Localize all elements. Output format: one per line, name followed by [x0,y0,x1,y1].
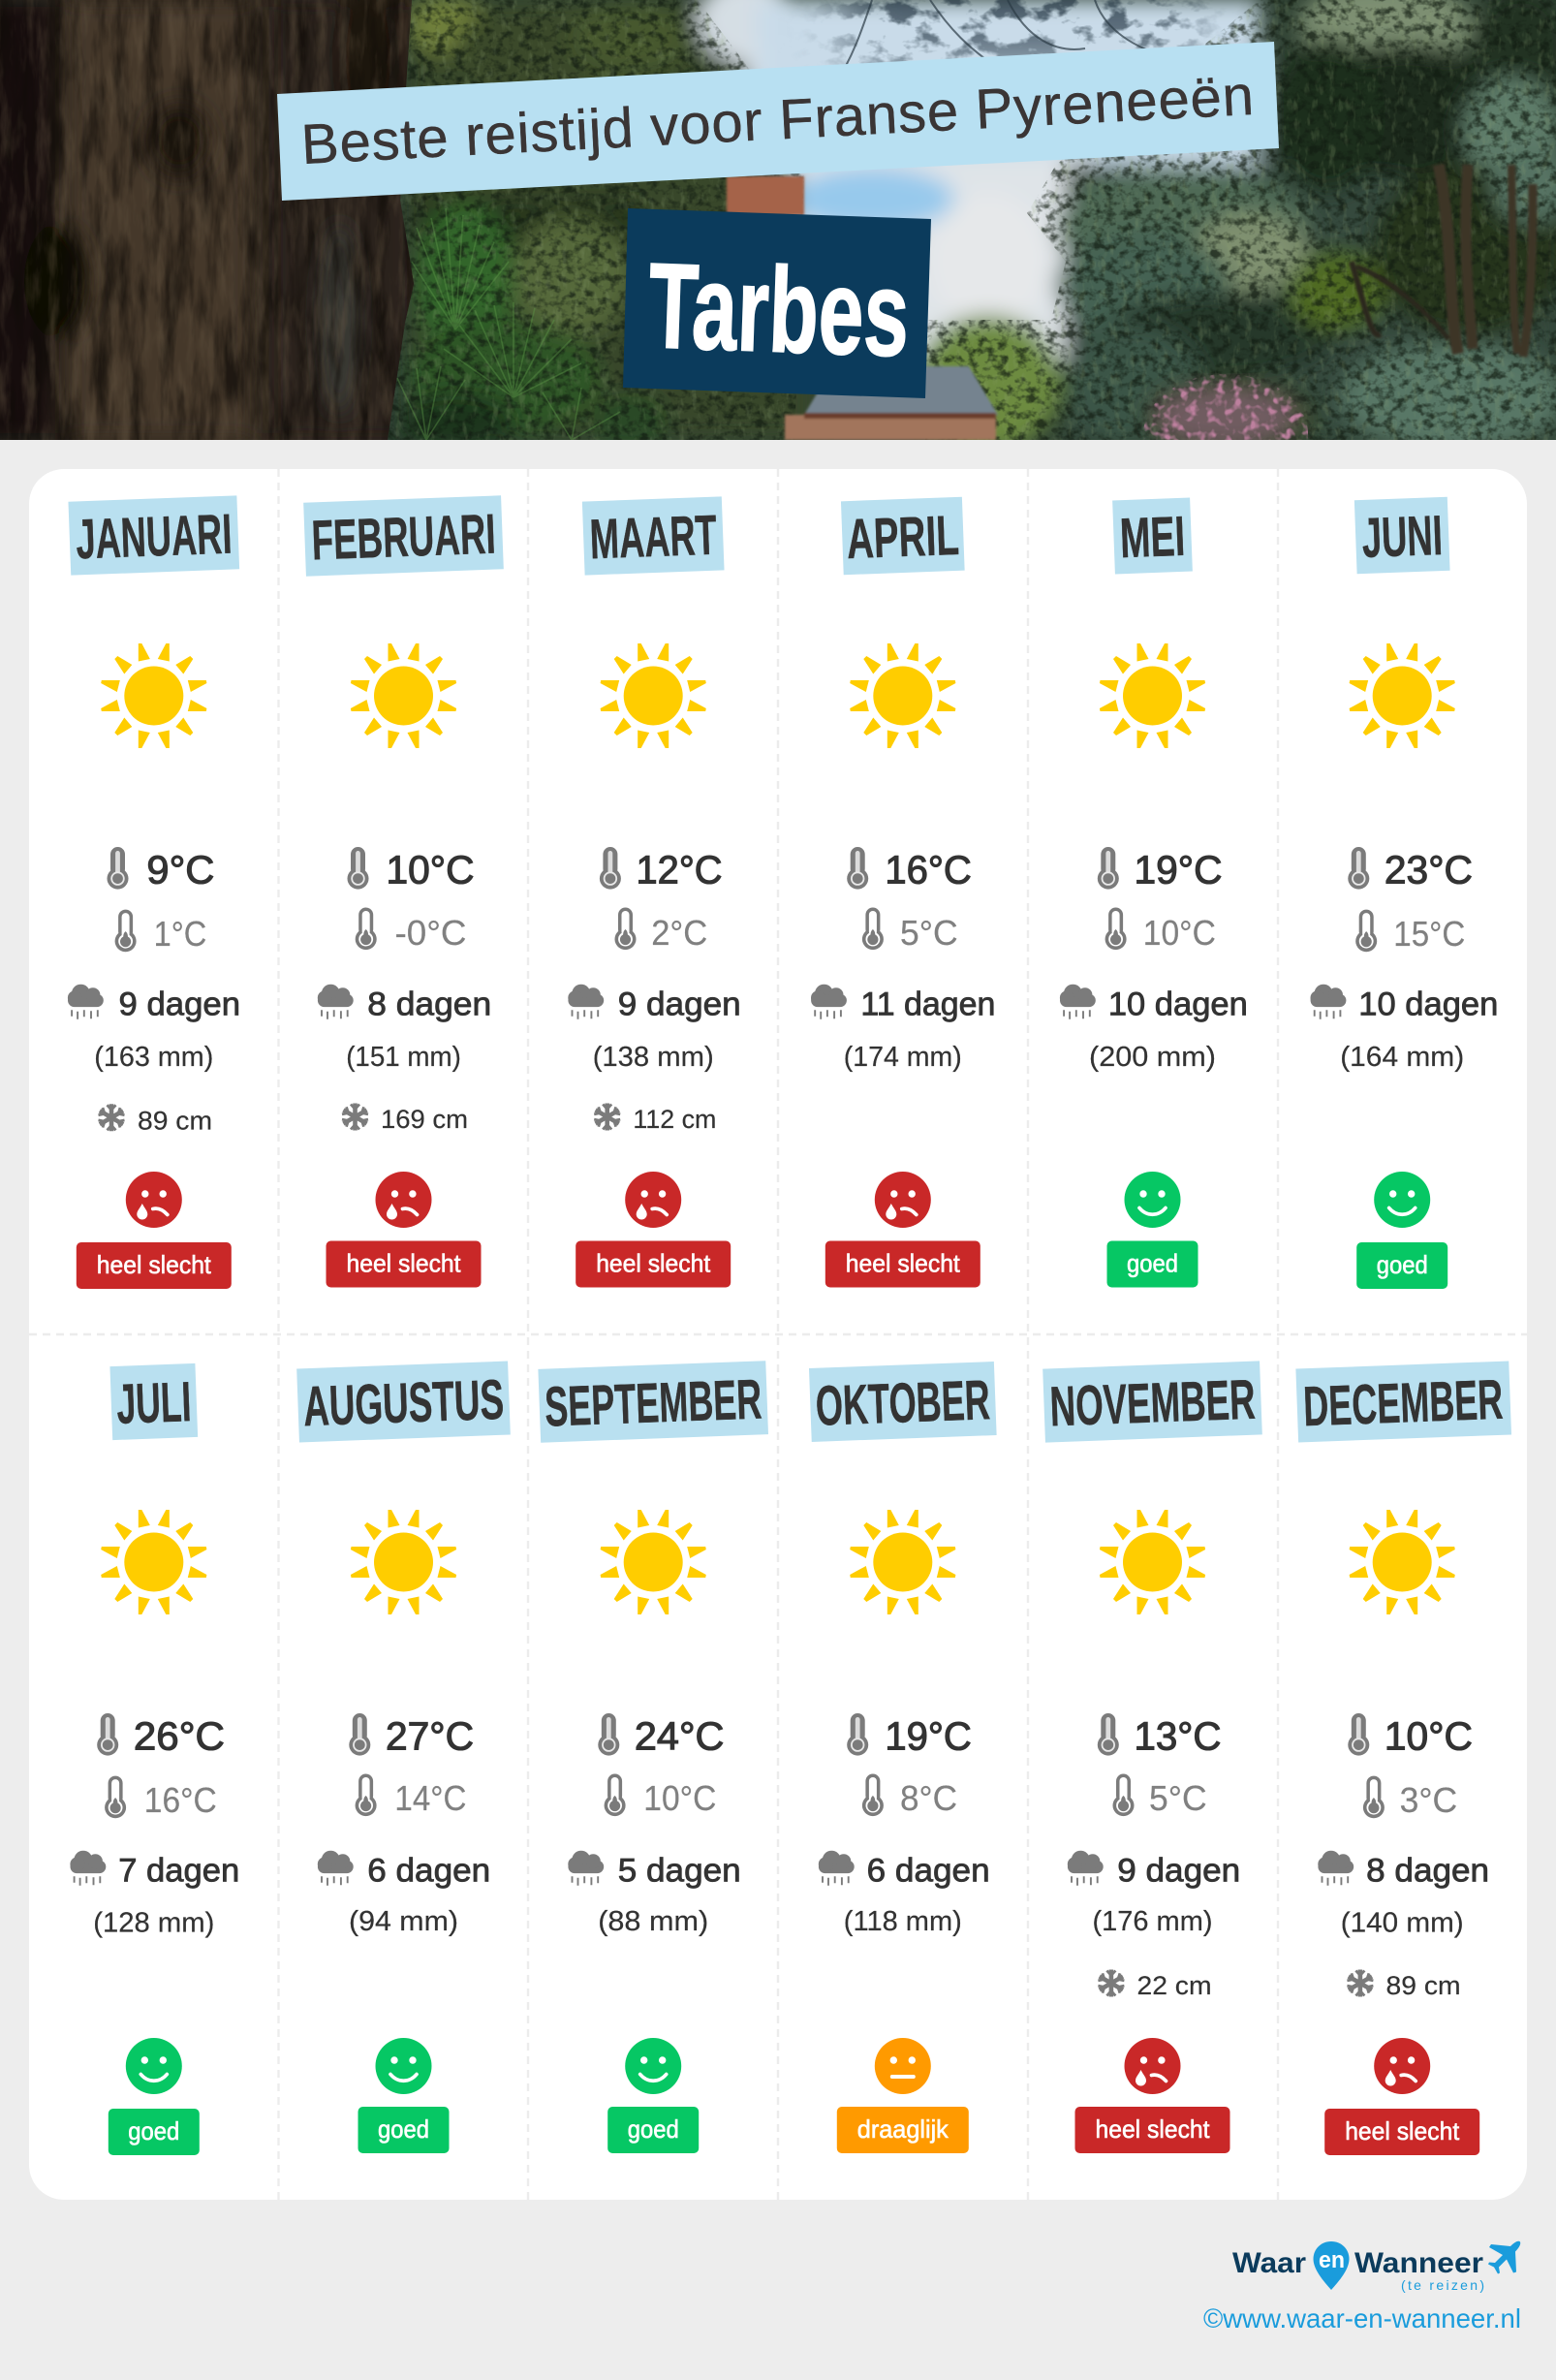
rainfall: (128 mm) [93,1907,214,1938]
month label: APRIL [846,504,960,571]
min temperature: 16°C [144,1780,217,1820]
min temperature: 3°C [1400,1780,1457,1820]
month: februari [303,495,504,1288]
min temperature: 10°C [643,1778,716,1818]
icon: sun [601,1510,706,1614]
min temperature [862,1773,957,1818]
snowfall [1347,1969,1461,2000]
max temperature: 9°C [146,847,214,892]
min temperature: 8°C [900,1778,957,1818]
icon: good face [1374,1172,1430,1228]
icon: very bad face [1124,2038,1180,2094]
icon: sun [1100,643,1205,748]
min temperature [1355,910,1465,954]
max temperature: 24°C [635,1713,724,1758]
month: juli [70,1363,239,2155]
max temperature [600,847,723,892]
min temperature [1112,1773,1207,1818]
month label [809,1362,997,1442]
rainfall: (118 mm) [844,1906,962,1937]
rating badge [1356,1242,1447,1289]
rating badge: heel slecht [1095,2114,1210,2144]
icon: neutral face [875,2038,931,2094]
rainfall: (138 mm) [593,1042,714,1073]
rain days: 8 dagen [367,986,491,1023]
rainfall: (94 mm) [349,1906,458,1937]
max temperature: 13°C [1134,1713,1221,1758]
snowfall: 169 cm [381,1105,468,1134]
min temperature [1363,1776,1457,1820]
icon: sun [850,1510,955,1614]
logo: Waar en Wanneer: Wanneer [1354,2247,1483,2279]
month label: MEI [1119,505,1186,570]
snowfall: 89 cm [138,1107,212,1136]
icon: sun [351,1510,456,1614]
month label [303,495,504,577]
rainfall: (176 mm) [1093,1906,1213,1937]
max temperature [347,847,475,892]
title banner [277,42,1279,201]
rating badge: heel slecht [347,1248,461,1277]
month label: SEPTEMBER [544,1367,762,1439]
month label [109,1363,198,1440]
rating badge [358,2107,450,2153]
hero photo: trees, sky and brick building [0,0,1556,455]
icon: very bad face [1374,2038,1430,2094]
month label: MAART [589,504,718,571]
icon: good face [625,2038,681,2094]
rain days: 9 dagen [119,986,240,1023]
logo: Waar en Wanneer: (te reizen) [1401,2277,1484,2293]
month label: OKTOBER [815,1368,991,1438]
logo: Waar en Wanneer: Waar [1232,2247,1306,2279]
max temperature [349,1713,474,1758]
rainfall: (174 mm) [844,1042,962,1073]
rating badge [837,2107,969,2153]
month: juni [1310,497,1498,1289]
min temperature: 14°C [394,1778,466,1818]
logo: Waar en Wanneer [1232,2241,1520,2293]
month label [841,497,965,575]
rain days [318,1851,490,1890]
min temperature [105,1776,217,1820]
min temperature [862,907,958,953]
max temperature: 12°C [637,847,723,892]
month label: JULI [115,1370,193,1436]
rainfall: (140 mm) [1341,1907,1464,1938]
rainfall: (164 mm) [1340,1042,1464,1073]
rain days: 9 dagen [618,986,741,1023]
icon: sun [1350,1510,1455,1614]
rating badge: heel slecht [846,1248,961,1277]
city name box: Tarbes [646,238,912,382]
max temperature: 19°C [1134,847,1223,892]
rain days [1068,1851,1240,1890]
city name box [623,208,931,398]
month: oktober [809,1362,997,2153]
month label [582,496,725,576]
rating badge: draaglijk [857,2114,949,2144]
rainfall: (151 mm) [346,1042,461,1073]
icon: very bad face [126,1172,182,1228]
month label: AUGUSTUS [302,1368,505,1438]
month: augustus [296,1362,511,2153]
month: september [538,1361,768,2153]
icon: sun [351,643,456,748]
website credit: ©www.waar-en-wanneer.nl [1203,2303,1521,2333]
max temperature: 19°C [885,1713,972,1758]
rain days: 6 dagen [867,1853,990,1890]
month label [538,1361,768,1443]
snowfall: 22 cm [1137,1971,1211,2000]
rain days: 8 dagen [1366,1853,1489,1890]
month label: FEBRUARI [310,503,497,572]
snowfall: 89 cm [1385,1971,1460,2000]
rain days [1318,1851,1489,1890]
snowfall: 112 cm [633,1105,716,1134]
month label [1112,498,1193,574]
rain days: 7 dagen [118,1853,239,1890]
title banner: Beste reistijd voor Franse Pyreneeën [299,64,1255,176]
rainfall: (88 mm) [598,1906,708,1937]
month label [296,1362,511,1442]
max temperature: 10°C [386,847,475,892]
icon: good face [126,2038,182,2094]
rating badge [825,1240,980,1287]
snowfall [99,1104,212,1136]
max temperature: 16°C [885,847,972,892]
month label: NOVEMBER [1048,1368,1257,1438]
rating badge [326,1240,481,1287]
min temperature [356,907,467,953]
min temperature: 5°C [900,913,958,953]
rain days [68,985,240,1023]
rating badge: goed [128,2116,179,2145]
icon: very bad face [875,1172,931,1228]
min temperature [605,1773,716,1818]
icon: very bad face [376,1172,432,1228]
max temperature [847,1713,972,1758]
rainfall: (163 mm) [94,1042,213,1073]
month label: JUNI [1361,504,1444,570]
min temperature: 2°C [651,913,707,953]
max temperature [1348,1713,1473,1758]
panel: monthly climate card [29,469,1527,2200]
max temperature [1098,847,1223,892]
rating badge: goed [1127,1248,1178,1277]
icon: good face [376,2038,432,2094]
icon: sun [1350,643,1455,748]
rainfall: (200 mm) [1089,1042,1216,1073]
max temperature: 23°C [1385,847,1473,892]
rating badge: heel slecht [1345,2116,1460,2145]
max temperature: 27°C [386,1713,474,1758]
rain days [1310,985,1498,1023]
rain days [568,1851,741,1890]
max temperature [847,847,972,892]
month: januari [68,495,240,1289]
min temperature: 5°C [1149,1778,1207,1818]
month label [68,495,239,576]
rain days: 10 dagen [1108,986,1248,1023]
min temperature: 15°C [1393,914,1465,954]
rain days: 5 dagen [618,1853,741,1890]
max temperature [1098,1713,1221,1758]
rain days: 11 dagen [860,986,995,1023]
icon: good face [1124,1172,1180,1228]
month: december [1295,1361,1511,2155]
max temperature [107,847,214,892]
max temperature [1348,847,1473,892]
month label [1354,497,1450,574]
min temperature [356,1773,466,1818]
max temperature [97,1713,225,1758]
min temperature: -0°C [395,913,467,953]
max temperature: 10°C [1385,1713,1473,1758]
min temperature [1105,907,1216,953]
rating badge [607,2107,699,2153]
rain days [811,985,995,1023]
min temperature [614,907,707,953]
month label: JANUARI [75,503,233,571]
min temperature: 1°C [154,914,206,954]
rating badge [576,1240,731,1287]
rating badge [1075,2107,1230,2153]
rain days [318,985,491,1023]
rain days [568,985,741,1023]
rating badge [1324,2109,1479,2155]
rating badge: goed [628,2114,679,2144]
icon: sun [601,643,706,748]
rating badge [77,1242,232,1289]
icon: very bad face [625,1172,681,1228]
rating badge [1106,1240,1198,1287]
month: maart [568,496,741,1287]
rating badge: goed [378,2114,429,2144]
month label [1043,1361,1262,1443]
min temperature: 10°C [1143,913,1216,953]
icon: sun [1100,1510,1205,1614]
min temperature [115,910,206,954]
icon: sun [850,643,955,748]
month: mei [1060,498,1248,1287]
icon: sun [101,643,206,748]
rain days: 10 dagen [1358,986,1498,1023]
snowfall [342,1103,468,1134]
rain days [1060,985,1248,1023]
rain days [819,1851,990,1890]
rating badge: heel slecht [596,1248,711,1277]
rating badge: heel slecht [97,1250,212,1279]
month: november [1043,1361,1262,2153]
snowfall [1098,1969,1211,2000]
logo: Waar en Wanneer: en [1319,2247,1345,2273]
month: april [811,497,995,1287]
rating badge [109,2109,200,2155]
rain days: 6 dagen [367,1853,490,1890]
rain days [70,1851,239,1890]
max temperature [598,1713,724,1758]
rating badge: goed [1377,1250,1428,1279]
snowfall [594,1103,716,1134]
rain days: 9 dagen [1117,1853,1240,1890]
icon: sun [101,1510,206,1614]
max temperature: 26°C [134,1713,225,1758]
